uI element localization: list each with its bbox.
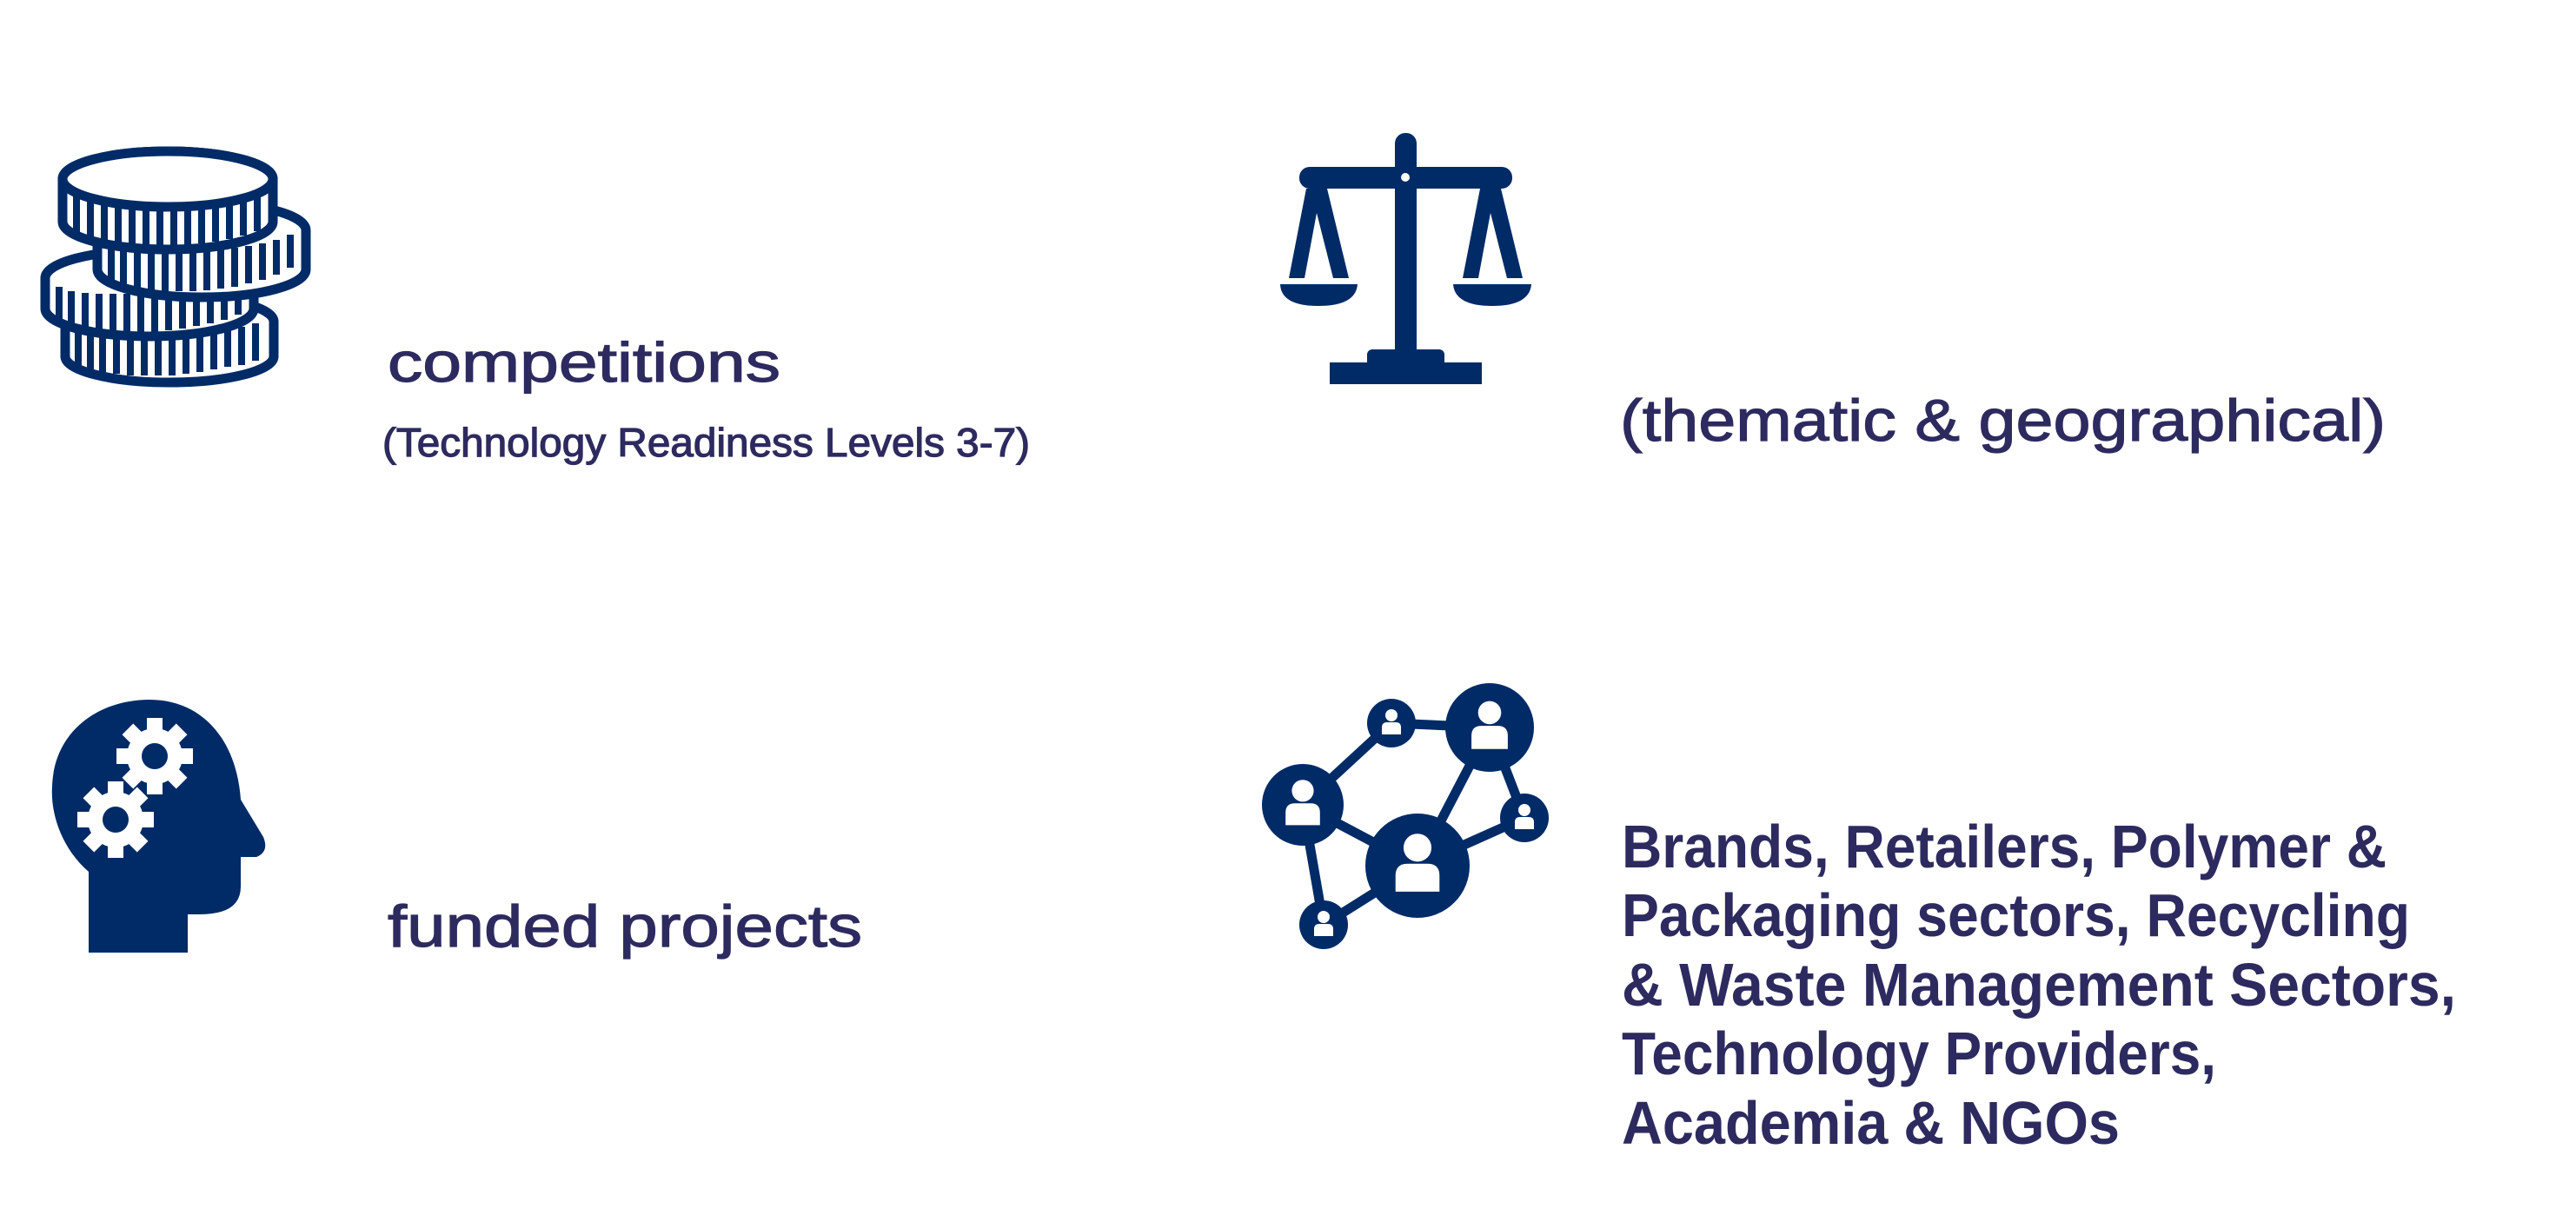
text: stakeholders: Packaging sectors, Recycling xyxy=(1622,881,2410,949)
text: stakeholders: Academia & NGOs xyxy=(1622,1089,2120,1157)
coin 2 xyxy=(97,203,306,297)
coin 4 bottom xyxy=(65,296,274,382)
text: thematic & geographical: (thematic & geographical) xyxy=(1620,388,2386,454)
text: stakeholders: Technology Providers, xyxy=(1622,1020,2216,1087)
coin 1 top xyxy=(63,151,273,249)
text: stakeholders: & Waste Management Sectors, xyxy=(1622,951,2456,1019)
text: stakeholders xyxy=(1622,813,2456,1157)
icon: head with gears xyxy=(52,700,265,953)
text: funded projects: funded projects xyxy=(388,893,862,960)
icon: network of people xyxy=(1262,683,1549,949)
coin 3 xyxy=(45,250,254,336)
icon: scales xyxy=(1280,133,1531,384)
heading: competitions: competitions xyxy=(388,331,780,394)
subtext: TRL: (Technology Readiness Levels 3-7) xyxy=(382,420,1030,465)
icon: coins xyxy=(45,151,306,382)
text: stakeholders: Brands, Retailers, Polymer & xyxy=(1622,813,2387,880)
